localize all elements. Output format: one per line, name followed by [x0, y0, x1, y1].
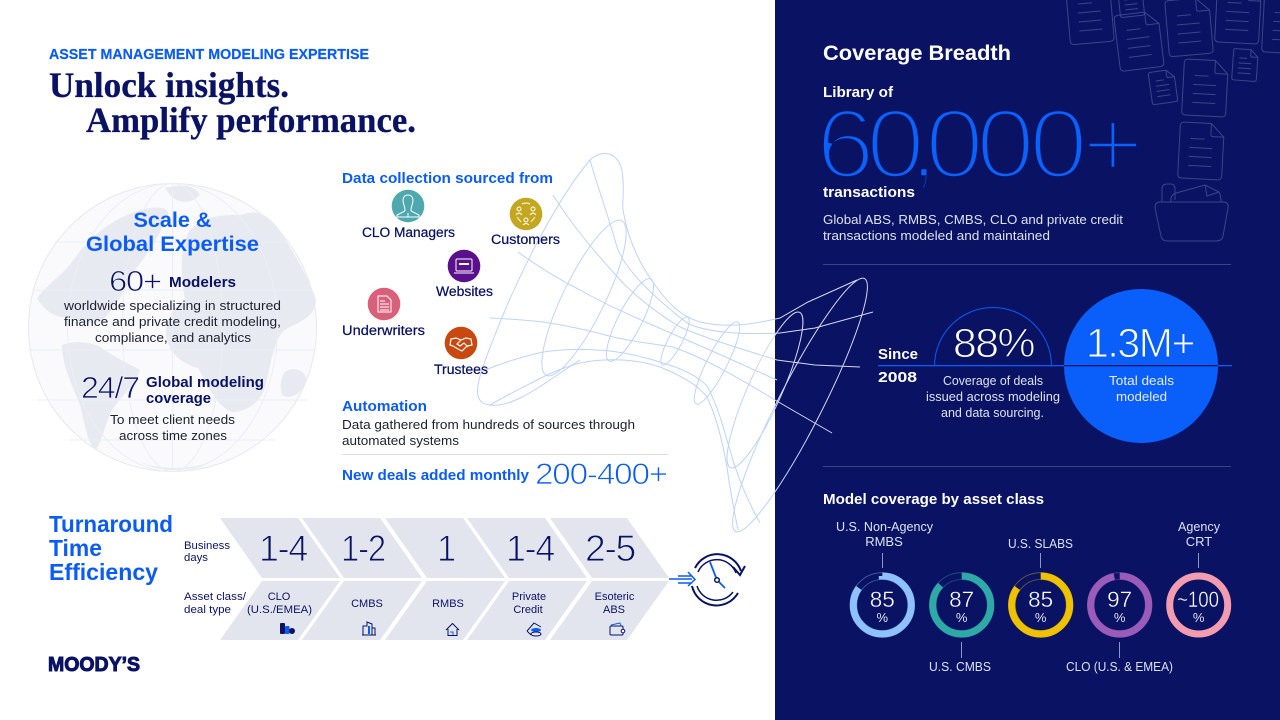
donut: U.S. Non-Agency RMBS 85%: 85 [870, 587, 895, 612]
heading: automation: Automation [342, 398, 427, 415]
donut: CLO 97%: CLO (U.S. & EMEA) [1066, 659, 1173, 674]
deal type labels: Credit [513, 604, 543, 616]
stat: 24/7 coverage: Global modeling [146, 374, 264, 391]
donut: CLO 97%: 97 [1107, 587, 1132, 612]
source: Customers: Customers [491, 232, 560, 247]
stat: 24/7 coverage: 24/7 [81, 370, 139, 405]
donut: U.S. CMBS 87%: U.S. CMBS [929, 659, 991, 674]
panel: data collection sources [342, 170, 668, 491]
source: Customers [491, 198, 560, 247]
heading: scale and global expertise [86, 209, 259, 256]
donut: U.S. SLABS 85%: U.S. SLABS [1008, 536, 1073, 551]
source: Trustees [434, 327, 488, 377]
donut: CLO 97%: % [1114, 610, 1126, 625]
deal type labels [247, 591, 635, 616]
text: total deals modeled: Total deals [1109, 374, 1174, 388]
panel: coverage breadth [816, 42, 1231, 265]
stat: 24/7 coverage [81, 370, 264, 407]
text: coverage of deals: Coverage of deals [943, 374, 1043, 388]
text: automation description: automated systems [342, 433, 460, 448]
panel: globe with scale and global expertise [28, 184, 316, 472]
text: coverage description: Global ABS, RMBS, CMBS, CLO and private credit [823, 212, 1123, 227]
text: modelers description: worldwide specializing in structured [63, 298, 281, 313]
decorative icons: floating documents and folder [1066, 0, 1280, 241]
donut: Agency CRT ~100%: Agency [1178, 519, 1220, 534]
source: Websites [436, 250, 493, 299]
heading: coverage breadth: Coverage Breadth [823, 42, 1011, 65]
stat: 24/7 coverage: coverage [146, 390, 211, 407]
donut: U.S. SLABS 85% [1008, 536, 1073, 637]
title line 1: Unlock insights. [49, 65, 289, 105]
text: automation description: Data gathered from hundreds of sources through [342, 417, 635, 432]
heading group [49, 47, 416, 140]
row labels: Asset class/ [184, 591, 247, 603]
heading: turnaround [49, 511, 173, 585]
heading: scale and global expertise: Scale & [134, 209, 212, 232]
donut: U.S. SLABS 85%: 85 [1028, 587, 1053, 612]
stat: 60+ modelers: Modelers [169, 274, 236, 291]
source: CLO Managers: CLO Managers [362, 225, 455, 240]
row labels: Business [184, 540, 231, 552]
panel: model coverage by asset class [823, 492, 1228, 674]
funnel wireframe illustration [477, 153, 884, 542]
donut: U.S. CMBS 87%: 87 [949, 587, 974, 612]
business day values: 1-4 [506, 528, 555, 569]
text: coverage of deals [926, 374, 1060, 420]
text: modelers description: finance and private credit modeling, [64, 314, 281, 329]
heading: turnaround: Time [49, 535, 102, 561]
donut: CLO 97% [1066, 573, 1173, 674]
donut: Agency CRT ~100%: % [1193, 610, 1205, 625]
source: CLO Managers [362, 190, 455, 240]
heading: turnaround: Efficiency [49, 559, 158, 585]
text: coverage of deals: issued across modeling [926, 390, 1060, 404]
label: since 2008: 2008 [878, 369, 917, 386]
text: coverage description [823, 212, 1123, 243]
icon: private credit [527, 623, 541, 636]
panel: coverage background [775, 0, 1280, 720]
donut: U.S. CMBS 87%: % [956, 610, 968, 625]
stat: 60,000+: 60,000+ [816, 89, 1144, 199]
source: Underwriters [342, 288, 425, 338]
stat: 60+ modelers: 60+ [109, 266, 161, 298]
deal type labels: CMBS [351, 598, 383, 610]
eyebrow: ASSET MANAGEMENT MODELING EXPERTISE [49, 47, 369, 63]
row labels: days [184, 552, 209, 564]
timeline axis [878, 365, 1232, 366]
donut: U.S. CMBS 87% [929, 573, 994, 674]
source: Underwriters: Underwriters [342, 323, 425, 338]
donut: Agency CRT ~100%: CRT [1186, 534, 1212, 549]
deal type labels: RMBS [432, 598, 464, 610]
heading: data collection: Data collection sourced from [342, 170, 553, 187]
business day values: 2-5 [585, 528, 636, 569]
stat: new deals added monthly: 200-400+ [535, 458, 668, 491]
deal type labels: (U.S./EMEA) [247, 604, 312, 616]
donut: U.S. Non-Agency RMBS 85%: % [877, 610, 889, 625]
icon: RMBS house [446, 624, 459, 636]
donut: U.S. Non-Agency RMBS 85%: RMBS [865, 534, 903, 549]
text: coverage description [110, 412, 236, 443]
text: coverage description: transactions modeled and maintained [823, 228, 1050, 243]
icon: clock with arrows [669, 554, 745, 605]
deal type labels: ABS [603, 604, 625, 616]
text: modelers description: compliance, and analytics [95, 330, 252, 345]
row labels [184, 540, 247, 616]
source: Websites: Websites [436, 284, 493, 299]
label: transactions: transactions [823, 185, 915, 201]
panel: turnaround time efficiency [49, 511, 745, 640]
stat: new deals added monthly: New deals added monthly [342, 467, 530, 484]
icon: CMBS building [362, 622, 376, 635]
text: total deals modeled: modeled [1116, 390, 1167, 404]
icon: CLO stacks [280, 623, 295, 634]
text: automation description [342, 417, 635, 448]
donut: U.S. Non-Agency RMBS 85%: U.S. Non-Agency [836, 519, 933, 534]
donut: U.S. Non-Agency RMBS 85% [836, 519, 933, 637]
arc: coverage semicircle [934, 308, 1052, 366]
business day values: 1-4 [259, 528, 308, 569]
text: coverage of deals: and data sourcing. [941, 406, 1044, 420]
donut: Agency CRT ~100% [1170, 519, 1228, 634]
text: coverage description: across time zones [119, 428, 228, 443]
label: library of: Library of [823, 85, 893, 101]
business day values [259, 528, 636, 569]
text: coverage description: To meet client needs [110, 412, 236, 427]
source: Trustees: Trustees [434, 362, 488, 377]
label: since 2008: Since [878, 346, 918, 363]
donut: Agency CRT ~100%: ~100 [1177, 587, 1219, 612]
label: since 2008 [878, 346, 918, 386]
panel: since 2008 stats [823, 289, 1232, 467]
stat: 88%: 88% [953, 320, 1034, 366]
stat: 1.3M+: 1.3M+ [1086, 320, 1194, 366]
title line 2: Amplify performance. [86, 100, 416, 140]
deal type labels: Esoteric [595, 591, 635, 603]
business day values: 1-2 [341, 528, 385, 569]
business day values: 1 [437, 528, 455, 569]
donut: U.S. SLABS 85%: % [1035, 610, 1047, 625]
stat: new deals added monthly [342, 458, 668, 491]
stat: 60+ modelers [109, 266, 236, 298]
text: modelers description [63, 298, 281, 345]
heading: scale and global expertise: Global Expertise [86, 233, 259, 256]
blue circle: total deals [1064, 289, 1218, 443]
deal type labels: Private [512, 591, 546, 603]
icon: esoteric wallet [610, 623, 625, 635]
text: total deals modeled [1109, 374, 1174, 404]
deal type labels: CLO [268, 591, 291, 603]
row labels: deal type [184, 604, 231, 616]
globe map [28, 184, 316, 472]
heading: turnaround: Turnaround [49, 511, 173, 537]
logo: Moody's: MOODY’S [48, 654, 140, 676]
chevron row [220, 518, 669, 640]
heading: model coverage: Model coverage by asset class [823, 492, 1044, 508]
